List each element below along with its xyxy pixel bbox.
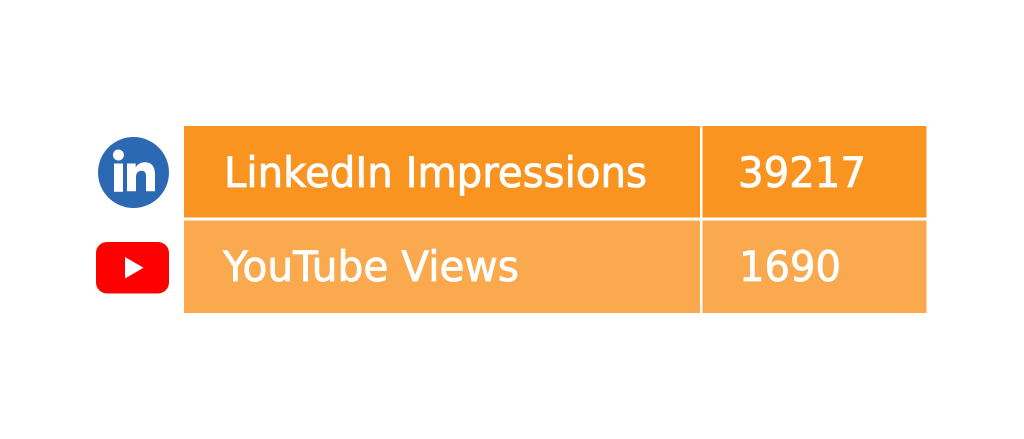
label: LinkedIn Impressions: LinkedIn Impressions — [224, 148, 647, 197]
icon: LinkedIn logo — [98, 137, 169, 208]
value: 1690: 1690 — [739, 242, 841, 291]
row 2 label cell — [184, 220, 700, 313]
row 1 value cell — [702, 126, 926, 218]
row 2 value cell — [702, 220, 926, 313]
label: YouTube Views: YouTube Views — [222, 242, 519, 291]
row 1 label cell — [184, 126, 700, 218]
table — [184, 126, 926, 313]
icon: YouTube logo — [96, 242, 169, 294]
value: 39217: 39217 — [738, 148, 866, 197]
